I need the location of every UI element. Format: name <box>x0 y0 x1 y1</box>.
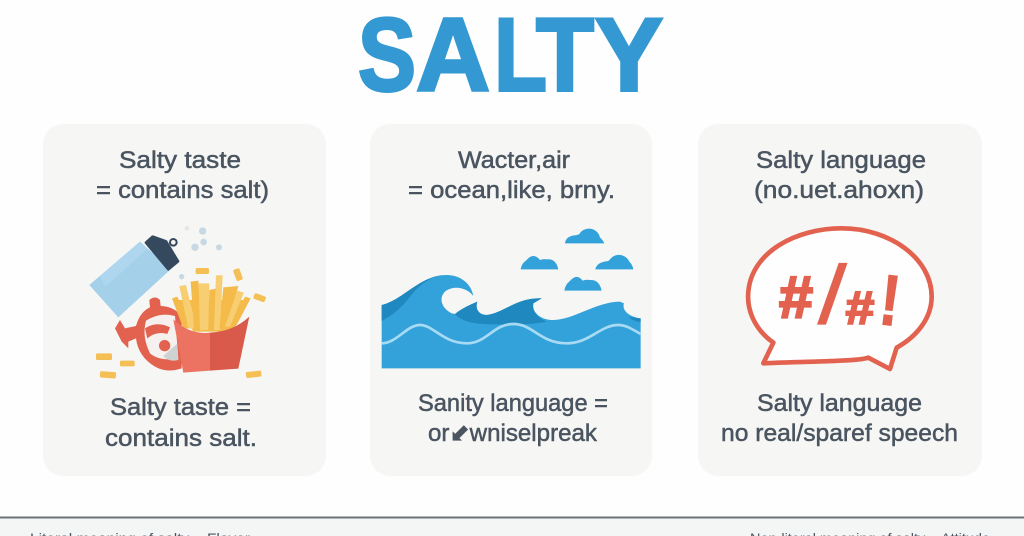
title: L <box>494 0 547 114</box>
panel 2 caption: Sanity language = <box>418 390 608 417</box>
icon: salt shaker and fries <box>89 226 266 379</box>
icon: fries carton <box>173 317 249 373</box>
icon: swear symbols <box>779 248 904 342</box>
icon: fry crumbs <box>96 268 266 379</box>
panel: water and air <box>370 124 652 476</box>
panel 3 heading <box>754 147 926 204</box>
icon: foam line <box>382 324 641 343</box>
panel 1 caption <box>105 394 257 452</box>
panel 2 heading <box>408 147 615 204</box>
icon: swear symbols: / <box>817 248 848 341</box>
icon: second dark wave <box>455 298 547 325</box>
panel 1 heading: = contains salt) <box>96 177 269 204</box>
panel: salty taste <box>43 124 326 476</box>
icon: swear symbols: # <box>846 282 874 334</box>
title: S <box>358 0 416 114</box>
title: Y <box>595 0 663 114</box>
icon: dark crest <box>382 275 447 321</box>
panel 1 caption: contains salt. <box>105 425 257 452</box>
panel 3 heading: (no.uet.ahoxn) <box>754 177 924 204</box>
icon: swear symbols: ! <box>876 260 904 342</box>
icon: clouds <box>521 229 633 291</box>
panel 2 heading: Wacter,air <box>458 147 570 174</box>
panel 3 caption: Salty language <box>757 390 922 417</box>
panel 3 caption: no real/sparef speech <box>721 420 958 447</box>
title: A <box>416 0 490 114</box>
title <box>358 0 663 114</box>
footer bar <box>0 516 1024 536</box>
icon: salt grains <box>179 226 222 279</box>
panel 2 heading: = ocean,like, brny. <box>408 177 615 204</box>
panel 2 caption: or⬋wniselpreak <box>428 420 598 447</box>
icon: red bottle <box>115 297 182 370</box>
icon: main wave <box>382 275 641 368</box>
panel 1 heading <box>96 147 269 204</box>
panel 3 heading: Salty language <box>756 147 926 174</box>
panel 3 caption <box>721 390 958 447</box>
icon: fries <box>172 275 251 332</box>
icon: swear symbols: # <box>779 264 813 331</box>
icon: bubble outline <box>748 228 932 369</box>
icon: ocean waves and clouds <box>382 229 641 368</box>
panel 1 caption: Salty taste = <box>110 394 251 421</box>
panel 2 caption <box>418 390 608 447</box>
panel 1 heading: Salty taste <box>119 147 241 174</box>
title: T <box>536 0 594 114</box>
icon: speech bubble with symbols <box>748 228 932 369</box>
icon: salt shaker <box>89 237 178 317</box>
panel: salty language <box>698 124 982 476</box>
